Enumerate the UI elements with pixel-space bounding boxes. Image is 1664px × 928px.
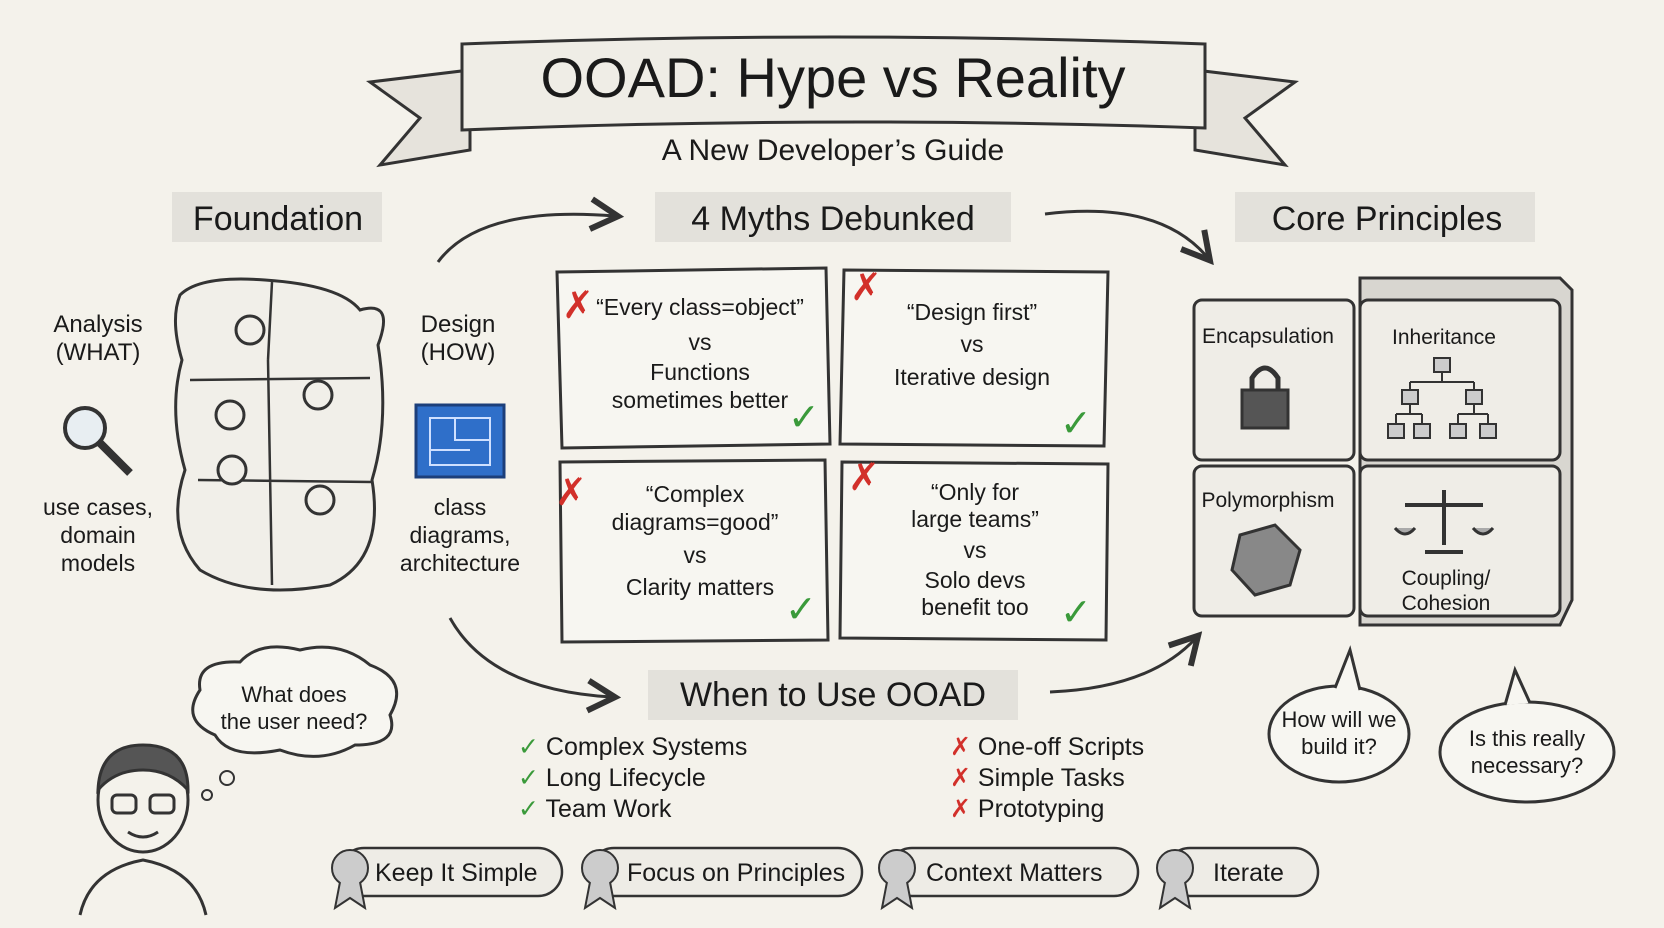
myth card 1: Functions <box>650 359 750 385</box>
myth card 3: vs <box>684 542 706 568</box>
title banner: OOAD: Hype vs Reality <box>540 46 1126 109</box>
badge: focus on principles <box>582 848 862 908</box>
icon: magnifier <box>65 408 130 473</box>
speech bubble: really necessary <box>1440 670 1614 802</box>
heading: foundation <box>172 192 382 242</box>
myth card 3: Clarity matters <box>626 574 774 600</box>
heading: myths: 4 Myths Debunked <box>691 200 975 238</box>
myth card 2: ✓ <box>1060 403 1092 445</box>
badge: keep it simple: Keep It Simple <box>375 859 538 887</box>
myth card 2: Iterative design <box>894 364 1050 390</box>
block: polymorphism: Polymorphism <box>1201 489 1335 512</box>
myth card 1 <box>557 268 830 448</box>
myth card 3 <box>555 460 828 642</box>
block: encapsulation <box>1194 300 1354 460</box>
text: analysis: (WHAT) <box>56 339 140 366</box>
block: coupling cohesion <box>1360 466 1560 616</box>
block: inheritance: Inheritance <box>1392 326 1496 349</box>
person <box>80 745 206 915</box>
text: design <box>421 311 495 366</box>
myth card 3: ✓ <box>785 589 817 631</box>
speech bubble: really necessary: Is this really <box>1469 726 1585 751</box>
myth card 2: ✗ <box>850 267 882 309</box>
list: use: ✓ Team Work <box>518 795 672 823</box>
myth card 1: ✗ <box>562 285 594 327</box>
list: avoid <box>950 733 1144 823</box>
myth card 4: ✗ <box>848 457 880 499</box>
text: use cases: use cases, <box>43 494 153 520</box>
text: use cases <box>43 494 153 576</box>
heading: core principles: Core Principles <box>1272 200 1502 238</box>
block: encapsulation: Encapsulation <box>1202 325 1334 348</box>
myth card 4: benefit too <box>921 594 1029 620</box>
badge: keep it simple <box>332 848 562 908</box>
heading: myths <box>655 192 1011 242</box>
heading: foundation: Foundation <box>193 200 363 238</box>
text: design: Design <box>421 311 495 338</box>
myth card 2 <box>840 267 1108 446</box>
badge: context matters: Context Matters <box>926 859 1102 887</box>
text: class diagrams: diagrams, <box>410 522 510 548</box>
myth card 2: vs <box>960 331 984 357</box>
myth card 1: sometimes better <box>612 387 789 413</box>
thought bubble <box>193 647 397 800</box>
badge: iterate <box>1157 848 1318 908</box>
heading: core principles <box>1235 192 1535 242</box>
myth card 2: “Design first” <box>907 299 1037 325</box>
text: class diagrams <box>400 494 520 576</box>
speech bubble: how will we build: build it? <box>1301 734 1377 759</box>
text: class diagrams: architecture <box>400 550 520 576</box>
speech bubble: how will we build: How will we <box>1282 707 1396 732</box>
core principles blocks <box>1194 278 1572 625</box>
text: class diagrams: class <box>434 494 486 520</box>
myth card 4: “Only for <box>931 479 1019 505</box>
puzzle blob <box>175 279 384 590</box>
subtitle: A New Developer’s Guide <box>662 134 1004 167</box>
list: avoid: ✗ Prototyping <box>950 795 1104 823</box>
list: use <box>518 733 747 823</box>
block: coupling cohesion: Coupling/ <box>1402 567 1491 590</box>
badge: iterate: Iterate <box>1213 859 1284 887</box>
block: coupling cohesion: Cohesion <box>1402 592 1490 615</box>
arrow: foundation to myths <box>438 214 615 262</box>
heading: when to use <box>648 670 1018 720</box>
myth card 1: “Every class=object” <box>596 294 804 320</box>
text: analysis: Analysis <box>53 311 143 338</box>
badge: focus on principles: Focus on Principles <box>627 859 845 887</box>
list: use: ✓ Long Lifecycle <box>518 764 706 792</box>
speech bubble: how will we build <box>1269 650 1409 782</box>
arrow: when to core <box>1050 638 1196 692</box>
myth card 1: vs <box>688 329 712 355</box>
list: avoid: ✗ One-off Scripts <box>950 733 1144 761</box>
list: use: ✓ Complex Systems <box>518 733 747 761</box>
list: avoid: ✗ Simple Tasks <box>950 764 1125 792</box>
myth card 4: ✓ <box>1060 592 1092 634</box>
text: design: (HOW) <box>421 339 495 366</box>
myth card 3: ✗ <box>555 472 587 514</box>
myth card 3: “Complex <box>646 481 745 507</box>
block: inheritance <box>1360 300 1560 460</box>
block: polymorphism <box>1194 466 1354 616</box>
title banner <box>370 37 1295 165</box>
myth card 4 <box>840 457 1108 640</box>
myth card 4: vs <box>964 537 986 563</box>
speech bubble: really necessary: necessary? <box>1471 753 1583 778</box>
text: use cases: models <box>61 550 135 576</box>
myth card 3: diagrams=good” <box>612 509 778 535</box>
badge: context matters <box>879 848 1138 908</box>
thought bubble: What does <box>241 682 347 707</box>
myth card 4: large teams” <box>911 506 1039 532</box>
myth card 4: Solo devs <box>924 567 1026 593</box>
arrow: myths to core <box>1045 211 1208 258</box>
thought bubble: the user need? <box>221 709 367 734</box>
text: use cases: domain <box>60 522 136 548</box>
heading: when to use: When to Use OOAD <box>680 676 986 714</box>
myth card 1: ✓ <box>788 397 820 439</box>
arrow: foundation to when <box>450 618 612 697</box>
text: analysis <box>53 311 143 366</box>
icon: blueprint <box>416 405 504 477</box>
